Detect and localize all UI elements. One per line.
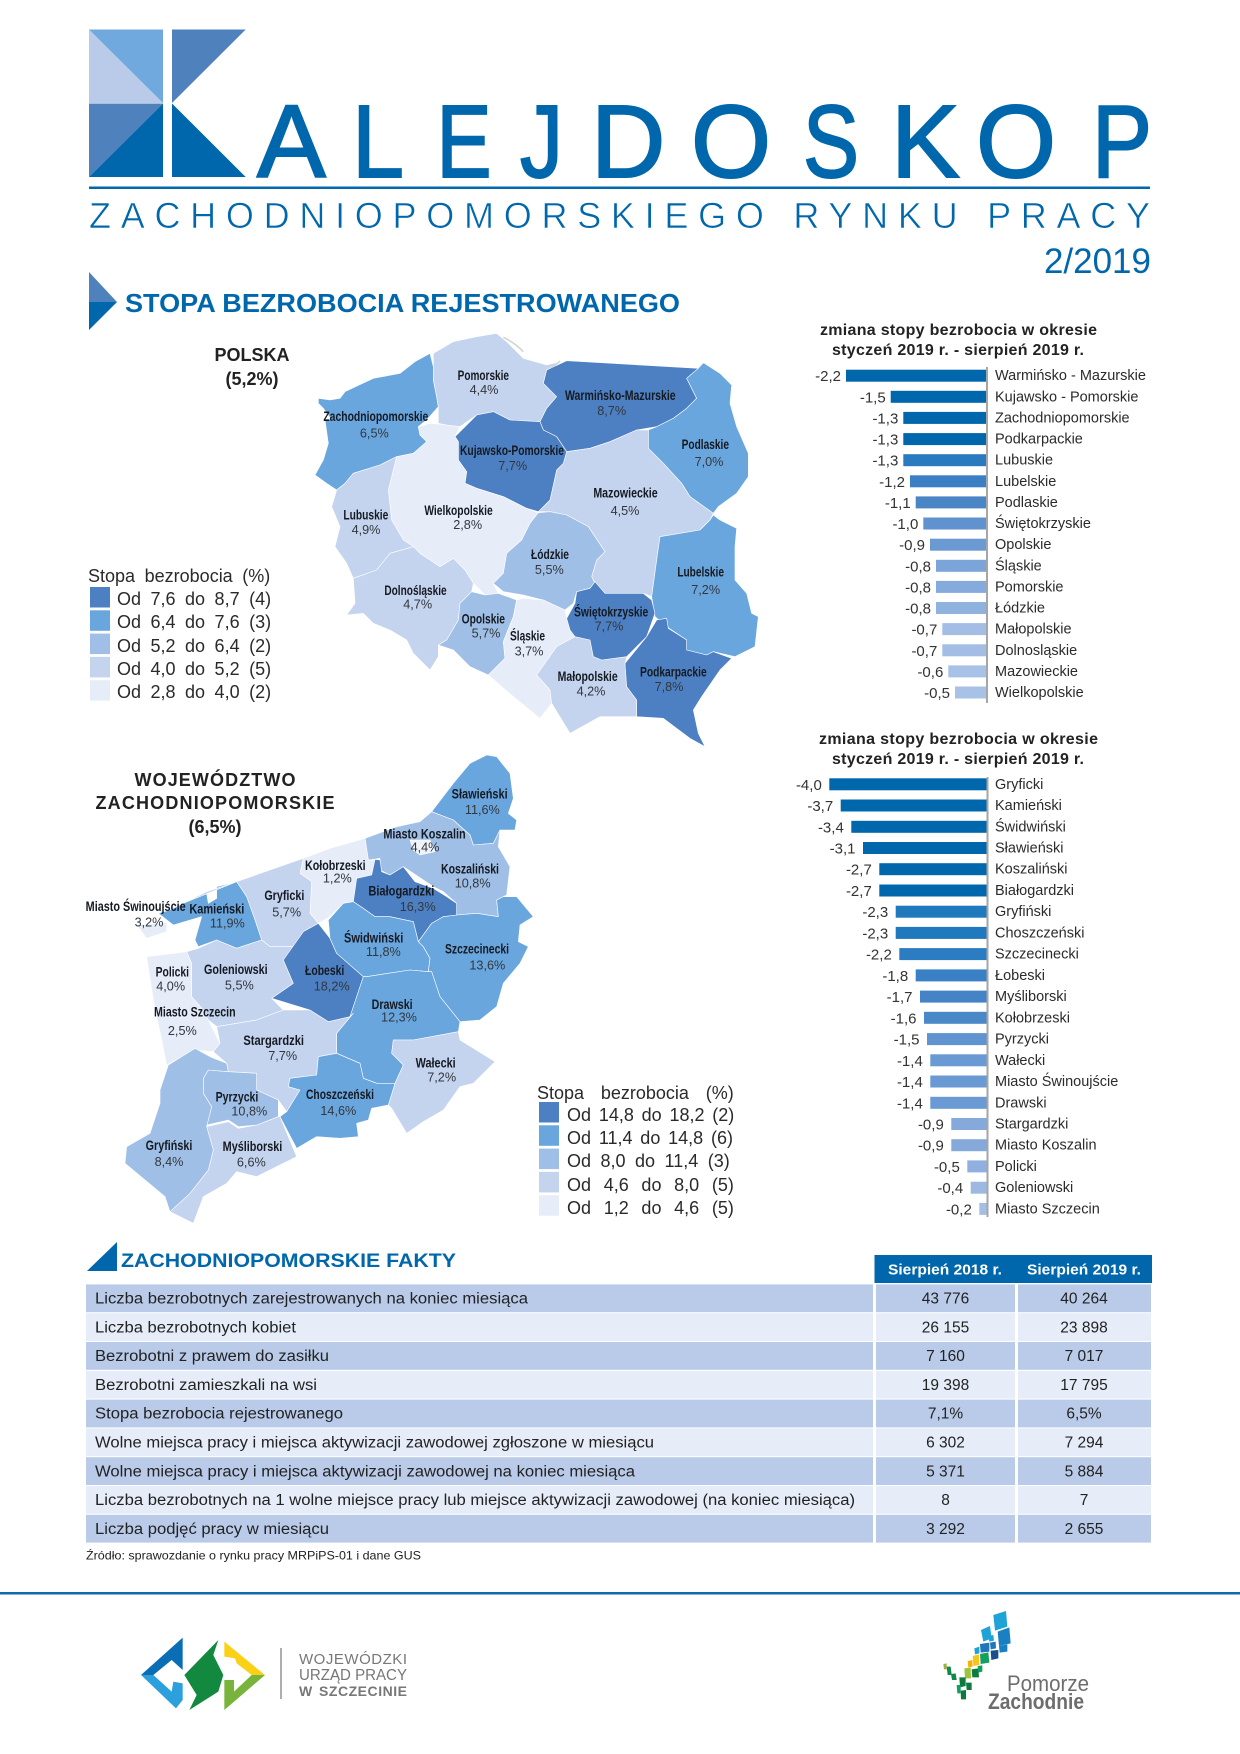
chart: zmiana stopy bezrobocia, powiaty: Kołobrzeski [995, 1010, 1070, 1026]
label: Goleniowski [204, 961, 268, 992]
chart: zmiana stopy bezrobocia, powiaty: Pyrzycki [995, 1032, 1049, 1048]
row 5: Stopa bezrobocia rejestrowanego [95, 1406, 343, 1423]
chart: zmiana stopy bezrobocia, województwa: Małopolskie [995, 622, 1072, 638]
heading: województwo: ZACHODNIOPOMORSKIE [96, 793, 334, 813]
title: KALEJDOSKOP: O [976, 84, 1056, 199]
label: Białogardzki: Białogardzki [368, 883, 434, 899]
row 9: 3 292 [926, 1521, 965, 1538]
label: Szczecinecki: 13,6% [469, 958, 505, 972]
chart: zmiana stopy bezrobocia, województwa: -0,7 [911, 622, 937, 639]
label: Podkarpackie [640, 664, 707, 694]
label: Gryfiński [146, 1137, 192, 1169]
label: Podlaskie [682, 436, 729, 469]
chart: zmiana stopy bezrobocia, województwa: Śląskie [995, 556, 1042, 574]
source note: Źródło: sprawozdanie o rynku pracy MRPiPS-01 i dane GUS [86, 1548, 421, 1562]
chart: zmiana stopy bezrobocia, powiaty: -0,9 [918, 1138, 944, 1155]
chart: zmiana stopy bezrobocia, powiaty: -4,0 [796, 777, 822, 794]
row 8 [86, 1486, 1151, 1514]
chart: zmiana stopy bezrobocia, powiaty: Choszczeński [995, 925, 1084, 941]
row 7: 5 884 [1065, 1463, 1104, 1480]
chart: zmiana stopy bezrobocia, województwa: -0,8 [905, 558, 931, 575]
label: Policki: 4,0% [156, 980, 185, 994]
logo: kaleidoscope K [89, 30, 246, 177]
chart: zmiana stopy bezrobocia, powiaty: -3,4 [818, 819, 844, 836]
chart: zmiana stopy bezrobocia, województwa: -0,5 [924, 685, 950, 702]
row 4: 19 398 [922, 1377, 969, 1394]
title: KALEJDOSKOP: P [1092, 84, 1152, 199]
chart: zmiana stopy bezrobocia, powiaty: -1,7 [887, 989, 912, 1006]
chart: zmiana stopy bezrobocia, województwa: -1,2 [879, 474, 905, 491]
chart: zmiana stopy bezrobocia, powiaty: Gryfiński [995, 904, 1051, 920]
chart: zmiana stopy bezrobocia, powiaty: -3,7 [807, 798, 833, 815]
label: Łobeski: 18,2% [314, 980, 350, 994]
row 1: 43 776 [922, 1290, 969, 1308]
label: Lubuskie [343, 506, 388, 537]
row 8: 8 [941, 1492, 950, 1509]
chart: zmiana stopy bezrobocia, powiaty: Sławieński [995, 840, 1064, 856]
chart: zmiana stopy bezrobocia, powiaty: Szczecinecki [995, 947, 1079, 963]
label: Koszaliński: Koszaliński [441, 860, 499, 876]
label: Mazowieckie: Mazowieckie [593, 485, 658, 501]
chart: zmiana stopy bezrobocia, województwa: Kujawsko - Pomorskie [995, 389, 1138, 405]
chart: zmiana stopy bezrobocia, powiaty: Białogardzki [995, 883, 1074, 899]
row 7: Wolne miejsca pracy i miejsca aktywizacji zawodowej na koniec miesiąca [95, 1463, 635, 1480]
label: Choszczeński: 14,6% [320, 1104, 356, 1118]
chart: zmiana stopy bezrobocia, powiaty: Koszaliński [995, 862, 1068, 878]
chart: zmiana stopy bezrobocia, powiaty: Miasto Szczecin [995, 1201, 1100, 1217]
label: Kołobrzeski [305, 857, 366, 886]
row 3: Bezrobotni z prawem do zasiłku [95, 1348, 329, 1365]
chart: zmiana stopy bezrobocia, powiaty: Wałecki [995, 1053, 1045, 1069]
label: Goleniowski: Goleniowski [204, 961, 268, 977]
logo text: Pomorze [1007, 1671, 1089, 1696]
legend: województwo: Od 4,6 do 8,0 (5) [567, 1175, 734, 1195]
label: Świdwiński: Świdwiński [344, 929, 403, 946]
chart: zmiana stopy bezrobocia, powiaty: -1,5 [894, 1032, 920, 1049]
row 1: Liczba bezrobotnych zarejestrowanych na koniec miesiąca [95, 1290, 528, 1308]
chart: zmiana stopy bezrobocia, województwa: -0,6 [917, 664, 943, 681]
label: Choszczeński: Choszczeński [306, 1086, 374, 1102]
label: Miasto Szczecin: 2,5% [168, 1024, 197, 1038]
label: Świętokrzyskie: Świętokrzyskie [574, 603, 648, 620]
section heading: stopa bezrobocia [89, 272, 680, 330]
logo text: URZĄD PRACY [299, 1667, 407, 1684]
logo: Wojewódzki Urząd Pracy [141, 1638, 407, 1710]
chart: zmiana stopy bezrobocia, województwa: Świętokrzyskie [995, 514, 1091, 532]
chart title [819, 731, 1098, 768]
masthead [89, 30, 1152, 281]
label: Kołobrzeski: Kołobrzeski [305, 857, 366, 873]
label: Białogardzki [368, 883, 436, 914]
label: Pyrzycki: Pyrzycki [216, 1089, 258, 1105]
label: Łódzkie [531, 546, 569, 577]
chart title: zmiana stopy bezrobocia w okresie [820, 322, 1097, 339]
label: Łódzkie: Łódzkie [531, 546, 569, 562]
heading: Polska [214, 345, 290, 389]
label: Zachodniopomorskie: 6,5% [360, 427, 389, 441]
chart: zmiana stopy bezrobocia, powiaty: Gryficki [995, 777, 1043, 793]
label: Zachodniopomorskie [323, 408, 428, 441]
label: Pyrzycki [216, 1089, 267, 1119]
chart: zmiana stopy bezrobocia, województwa: -1,3 [872, 432, 898, 449]
heading: Polska: POLSKA [214, 345, 290, 365]
legend: województwo: Od 1,2 do 4,6 (5) [567, 1198, 734, 1218]
chart: zmiana stopy bezrobocia, województwa: -1,3 [872, 410, 898, 427]
label: Drawski [372, 996, 417, 1025]
label: Miasto Koszalin: Miasto Koszalin [383, 825, 466, 841]
subtitle: ZACHODNIOPOMORSKIEGO RYNKU PRACY [89, 195, 1150, 236]
chart: zmiana stopy bezrobocia, województwa: Zachodniopomorskie [995, 410, 1130, 426]
legend: Polska: Stopa bezrobocia (%) [88, 566, 270, 586]
chart: zmiana stopy bezrobocia, powiaty: -1,4 [897, 1095, 923, 1112]
title: KALEJDOSKOP: D [591, 84, 665, 199]
chart: zmiana stopy bezrobocia, województwa: Mazowieckie [995, 664, 1078, 680]
legend: Polska: Od 5,2 do 6,4 (2) [117, 636, 271, 656]
chart: zmiana stopy bezrobocia, powiaty: -2,3 [862, 904, 888, 921]
label: Lubuskie: 4,9% [352, 523, 380, 537]
label: Lubuskie: Lubuskie [343, 506, 388, 522]
label: Miasto Świnoujście: 3,2% [135, 916, 163, 930]
label: Miasto Świnoujście [86, 897, 186, 930]
chart: zmiana stopy bezrobocia, województwa: -1,5 [860, 389, 886, 406]
chart title: styczeń 2019 r. - sierpień 2019 r. [832, 751, 1084, 768]
row 4: Bezrobotni zamieszkali na wsi [95, 1377, 317, 1394]
label: Podlaskie: 7,0% [695, 455, 723, 469]
row 3: 7 017 [1065, 1348, 1103, 1365]
label: Kamieński: 11,9% [210, 917, 245, 931]
heading: województwo: WOJEWÓDZTWO [134, 769, 296, 790]
map: Polska [315, 333, 758, 747]
row 6: 6 302 [926, 1434, 965, 1452]
label: Gryficki: 5,7% [272, 906, 301, 920]
row 5: 6,5% [1066, 1406, 1102, 1423]
label: Dolnośląskie: Dolnośląskie [384, 582, 447, 598]
legend: województwo: Od 8,0 do 11,4 (3) [567, 1151, 730, 1171]
label: Policki: Policki [156, 964, 189, 980]
label: Miasto Koszalin [383, 825, 466, 855]
label: Kołobrzeski: 1,2% [323, 872, 352, 886]
row 2: 23 898 [1060, 1319, 1108, 1336]
label: Pyrzycki: 10,8% [231, 1105, 267, 1119]
logo text [988, 1671, 1089, 1714]
heading: Polska: (5,2%) [225, 369, 279, 389]
logo text [299, 1651, 407, 1699]
chart: zmiana stopy bezrobocia, powiaty: -2,3 [862, 925, 888, 942]
label: Myśliborski: Myśliborski [223, 1138, 282, 1154]
chart: zmiana stopy bezrobocia, powiaty: -2,7 [846, 883, 872, 900]
chart: zmiana stopy bezrobocia, powiaty: -0,5 [934, 1159, 960, 1176]
chart: zmiana stopy bezrobocia, powiaty: -0,9 [918, 1116, 944, 1134]
label: Choszczeński [306, 1086, 374, 1118]
label: Lubelskie [677, 564, 724, 597]
label: Kamieński [189, 900, 245, 931]
logo text: Zachodnie [988, 1689, 1084, 1714]
row 8: Liczba bezrobotnych na 1 wolne miejsce pracy lub miejsce aktywizacji zawodowej (na koniec miesiąca) [95, 1492, 855, 1509]
label: Drawski: 12,3% [381, 1011, 417, 1025]
title: KALEJDOSKOP: L [352, 84, 404, 199]
row 4: 17 795 [1060, 1377, 1108, 1394]
legend: województwo: Stopa bezrobocia (%) [537, 1083, 734, 1103]
row 6 [86, 1428, 1151, 1456]
logo text: WOJEWÓDZKI [299, 1651, 407, 1668]
title: KALEJDOSKOP [257, 84, 1152, 199]
label: Gryfiński: Gryfiński [146, 1137, 192, 1153]
label: Myśliborski [223, 1138, 282, 1170]
title: KALEJDOSKOP: S [803, 84, 859, 199]
chart: zmiana stopy bezrobocia, województwa: -0,8 [905, 600, 931, 618]
chart: zmiana stopy bezrobocia, powiaty: Miasto Świnoujście [995, 1072, 1118, 1090]
label: Stargardzki: 7,7% [268, 1049, 297, 1063]
label: Lubelskie: Lubelskie [677, 564, 724, 580]
heading: województwo [96, 769, 334, 837]
legend: województwo [537, 1083, 734, 1218]
label: Mazowieckie [593, 485, 658, 518]
chart: zmiana stopy bezrobocia, powiaty: Kamieński [995, 798, 1062, 814]
row 1 [86, 1284, 1151, 1312]
chart: zmiana stopy bezrobocia, województwa: -0,9 [899, 537, 925, 554]
legend: województwo: Od 14,8 do 18,2 (2) [567, 1105, 734, 1125]
label: Mazowieckie: 4,5% [611, 504, 639, 518]
logo: Pomorze Zachodnie [943, 1611, 1089, 1714]
label: Szczecinecki [445, 940, 509, 972]
label: Wielkopolskie [424, 502, 493, 532]
legend: Polska [88, 566, 271, 702]
label: Drawski: Drawski [372, 996, 413, 1012]
label: Lubelskie: 7,2% [691, 583, 720, 597]
label: Podkarpackie: 7,8% [655, 680, 683, 694]
row 6: 7 294 [1065, 1434, 1104, 1452]
label: Opolskie [462, 610, 505, 641]
row 5 [86, 1400, 1151, 1427]
label: Opolskie: 5,7% [472, 627, 500, 641]
title: KALEJDOSKOP: K [891, 84, 960, 199]
chart: zmiana stopy bezrobocia, województwa: -1,0 [892, 516, 918, 533]
label: Łobeski: Łobeski [305, 962, 344, 978]
row 1: 40 264 [1060, 1290, 1108, 1308]
chart: zmiana stopy bezrobocia, powiaty: Stargardzki [995, 1116, 1068, 1132]
label: Gryfiński: 8,4% [155, 1155, 183, 1169]
table: fakty [86, 1255, 1152, 1543]
chart: zmiana stopy bezrobocia, województwa: Łódzkie [995, 600, 1045, 616]
label: Opolskie: Opolskie [462, 610, 505, 626]
map: województwo zachodniopomorskie [86, 755, 533, 1223]
label: Kamieński: Kamieński [189, 900, 244, 916]
label: Stargardzki: Stargardzki [243, 1032, 304, 1048]
chart title [820, 322, 1097, 359]
chart: zmiana stopy bezrobocia, województwa: -0,8 [905, 579, 931, 596]
section heading: stopa bezrobocia: STOPA BEZROBOCIA REJESTROWANEGO [125, 288, 680, 318]
label: Małopolskie: Małopolskie [558, 668, 618, 684]
row 2: 26 155 [922, 1319, 969, 1336]
chart: zmiana stopy bezrobocia, powiaty: -2,7 [846, 862, 872, 879]
chart: zmiana stopy bezrobocia, powiaty: Policki [995, 1159, 1037, 1175]
section heading: zachodniopomorskie fakty: ZACHODNIOPOMORSKIE FAKTY [121, 1250, 456, 1272]
chart: zmiana stopy bezrobocia, województwa: -2,2 [815, 368, 841, 385]
label: Pomorskie: Pomorskie [458, 367, 509, 383]
chart: zmiana stopy bezrobocia, powiaty: -1,4 [897, 1053, 923, 1070]
row 3 [86, 1342, 1151, 1370]
chart title: styczeń 2019 r. - sierpień 2019 r. [832, 342, 1084, 359]
chart: zmiana stopy bezrobocia, powiaty: -3,1 [830, 840, 856, 858]
label: Kujawsko-Pomorskie: 7,7% [498, 459, 527, 473]
label: Łobeski [305, 962, 350, 994]
table header: Sierpień 2018 r. [888, 1262, 1002, 1278]
label: Warmińsko-Mazurskie: Warmińsko-Mazurskie [565, 387, 676, 403]
chart: zmiana stopy bezrobocia, powiaty: -1,4 [897, 1074, 923, 1091]
table header [874, 1255, 1152, 1283]
row 5: 7,1% [928, 1406, 963, 1423]
chart: zmiana stopy bezrobocia, województwa: Warmińsko - Mazurskie [995, 368, 1146, 384]
label: Wałecki: Wałecki [416, 1054, 456, 1070]
logo text: SZCZECINIE [319, 1683, 407, 1699]
label: Białogardzki: 16,3% [400, 900, 436, 914]
label: Sławieński: 11,6% [465, 803, 500, 817]
label: Śląskie: Śląskie [510, 627, 545, 644]
label: Sławieński [452, 786, 508, 817]
label: Świętokrzyskie [574, 603, 648, 634]
label: Miasto Świnoujście: Miasto Świnoujście [86, 897, 186, 914]
label: Goleniowski: 5,5% [225, 978, 254, 992]
chart: zmiana stopy bezrobocia, województwa: Pomorskie [995, 579, 1064, 595]
chart: zmiana stopy bezrobocia, województwa: Lubuskie [995, 453, 1053, 469]
label: Myśliborski: 6,6% [237, 1156, 266, 1170]
chart: zmiana stopy bezrobocia, województwa: Podkarpackie [995, 432, 1083, 448]
label: Miasto Koszalin: 4,4% [411, 841, 439, 855]
section heading: zachodniopomorskie fakty [87, 1242, 456, 1272]
label: Gryficki: Gryficki [264, 887, 304, 903]
label: Świdwiński: 11,8% [366, 945, 401, 959]
label: Wałecki [416, 1054, 456, 1085]
row 8: 7 [1080, 1492, 1088, 1509]
label: Stargardzki [243, 1032, 304, 1063]
chart: zmiana stopy bezrobocia, województwa [815, 322, 1146, 703]
label: Małopolskie: 4,2% [577, 685, 605, 699]
chart: zmiana stopy bezrobocia, powiaty: -0,4 [937, 1180, 963, 1197]
legend: Polska: Od 2,8 do 4,0 (2) [117, 682, 271, 702]
label: Wielkopolskie: Wielkopolskie [424, 502, 493, 518]
row 6: Wolne miejsca pracy i miejsca aktywizacji zawodowej zgłoszone w miesiącu [95, 1434, 654, 1452]
row 7: 5 371 [926, 1463, 965, 1480]
row 2 [86, 1313, 1151, 1341]
label: Łódzkie: 5,5% [535, 563, 564, 577]
label: Wielkopolskie: 2,8% [453, 518, 482, 532]
chart: zmiana stopy bezrobocia, powiaty: -1,6 [891, 1010, 916, 1027]
chart: zmiana stopy bezrobocia, województwa: -1,3 [872, 453, 898, 470]
label: Dolnośląskie: 4,7% [403, 598, 432, 612]
legend: Polska: Od 4,0 do 5,2 (5) [117, 659, 271, 679]
label: Dolnośląskie [384, 582, 447, 612]
table header: Sierpień 2019 r. [1027, 1262, 1141, 1278]
label: Miasto Szczecin [154, 1004, 236, 1038]
legend: Polska: Od 7,6 do 8,7 (4) [117, 589, 271, 609]
chart: zmiana stopy bezrobocia, powiaty: Myśliborski [995, 989, 1067, 1005]
title: KALEJDOSKOP: E [436, 84, 492, 199]
chart: zmiana stopy bezrobocia, powiaty [796, 731, 1118, 1218]
chart: zmiana stopy bezrobocia, województwa: -1,1 [885, 495, 911, 512]
chart: zmiana stopy bezrobocia, powiaty: Łobeski [995, 968, 1045, 984]
label: Małopolskie [558, 668, 618, 699]
chart: zmiana stopy bezrobocia, województwa: -0,7 [911, 643, 937, 660]
heading: województwo: (6,5%) [188, 817, 242, 837]
chart: zmiana stopy bezrobocia, województwa: Podlaskie [995, 495, 1058, 511]
label: Zachodniopomorskie: Zachodniopomorskie [323, 408, 428, 424]
chart: zmiana stopy bezrobocia, województwa: Wielkopolskie [995, 685, 1084, 701]
label: Śląskie [510, 627, 545, 659]
label: Warmińsko-Mazurskie [565, 387, 676, 418]
chart: zmiana stopy bezrobocia, powiaty: Drawski [995, 1095, 1047, 1111]
row 7 [86, 1457, 1151, 1485]
label: Koszaliński: 10,8% [455, 877, 491, 891]
chart: zmiana stopy bezrobocia, powiaty: Goleniowski [995, 1180, 1073, 1196]
title: KALEJDOSKOP: O [691, 84, 771, 199]
chart: zmiana stopy bezrobocia, powiaty: -1,8 [882, 968, 908, 985]
chart: zmiana stopy bezrobocia, województwa: Dolnosląskie [995, 643, 1077, 659]
label: Koszaliński [441, 860, 499, 891]
label: Podlaskie: Podlaskie [682, 436, 729, 452]
label: Podkarpackie: Podkarpackie [640, 664, 707, 680]
label: Kujawsko-Pomorskie: Kujawsko-Pomorskie [460, 442, 564, 458]
row 4 [86, 1371, 1151, 1399]
chart: zmiana stopy bezrobocia, powiaty: -0,2 [946, 1201, 972, 1218]
label: Miasto Szczecin: Miasto Szczecin [154, 1004, 236, 1020]
issue number: 2/2019 [1044, 242, 1151, 281]
chart: zmiana stopy bezrobocia, powiaty: -2,2 [866, 947, 892, 964]
label: Świdwiński [344, 929, 403, 959]
legend: Polska: Od 6,4 do 7,6 (3) [117, 612, 271, 632]
label: Świętokrzyskie: 7,7% [595, 620, 623, 634]
legend: województwo: Od 11,4 do 14,8 (6) [567, 1128, 733, 1148]
icon: checkmark of squares [943, 1611, 1011, 1699]
label: Wałecki: 7,2% [427, 1071, 456, 1085]
label: Pomorskie [458, 367, 509, 397]
label: Sławieński: Sławieński [452, 786, 508, 802]
row 9: 2 655 [1065, 1521, 1103, 1538]
label: Policki [156, 964, 189, 994]
label: Pomorskie: 4,4% [470, 383, 498, 397]
label: Warmińsko-Mazurskie: 8,7% [597, 404, 626, 418]
chart: zmiana stopy bezrobocia, województwa: Lubelskie [995, 474, 1056, 490]
chart: zmiana stopy bezrobocia, powiaty: Miasto Koszalin [995, 1138, 1097, 1154]
row 2: Liczba bezrobotnych kobiet [95, 1319, 297, 1336]
icon: WUP diamonds [141, 1638, 265, 1710]
title: KALEJDOSKOP: J [520, 84, 563, 199]
title: KALEJDOSKOP: A [257, 84, 326, 199]
label: Kujawsko-Pomorskie [460, 442, 564, 473]
label: Gryficki [264, 887, 304, 920]
row 3: 7 160 [926, 1348, 965, 1365]
chart: zmiana stopy bezrobocia, powiaty: Świdwiński [995, 817, 1066, 835]
logo text: W [299, 1683, 313, 1699]
row 9: Liczba podjęć pracy w miesiącu [95, 1521, 329, 1538]
row 9 [86, 1515, 1151, 1543]
label: Śląskie: 3,7% [515, 645, 543, 659]
chart: zmiana stopy bezrobocia, województwa: Opolskie [995, 537, 1051, 553]
chart title: zmiana stopy bezrobocia w okresie [819, 731, 1098, 748]
label: Szczecinecki: Szczecinecki [445, 940, 509, 956]
